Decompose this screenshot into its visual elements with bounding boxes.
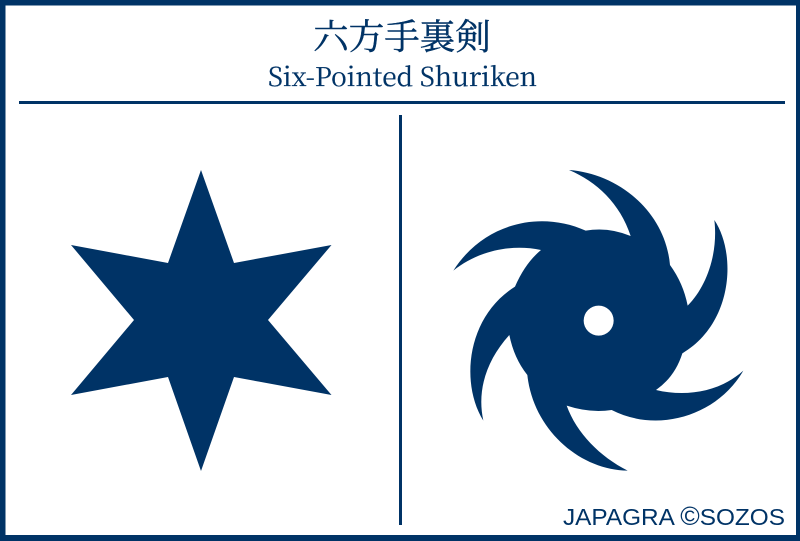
icon: six-pointed star <box>71 170 332 471</box>
Japanese heading: 六方手裏剣 <box>313 17 491 57</box>
icon: curved six-bladed shuriken <box>453 170 743 471</box>
title <box>268 17 537 94</box>
English heading: Six-Pointed Shuriken <box>268 57 537 94</box>
credit: JAPAGRA ©SOZOS <box>563 503 785 531</box>
